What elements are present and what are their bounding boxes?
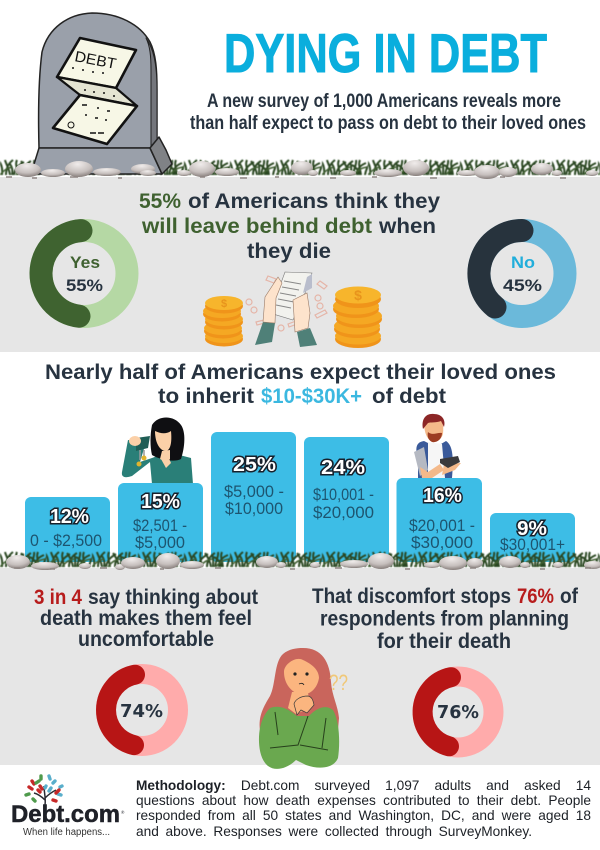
icon: hands holding receipt <box>246 272 327 347</box>
bar: 2,501 to 5,000 <box>118 483 203 562</box>
bar chart: expected inherited debt <box>25 432 575 562</box>
logo tree <box>26 776 62 805</box>
bar: 5,000 to 10,000: $10,000 <box>225 499 283 518</box>
bar: 2,501 to 5,000: $2,501 - <box>133 516 187 535</box>
donut: yes 55%: 55% <box>66 277 103 295</box>
methodology text: Methodology: Debt.com surveyed 1,097 adults and asked 14 <box>136 778 591 793</box>
heading: that discomfort: 76% <box>517 585 554 608</box>
donut: no 45%: 45% <box>503 277 542 295</box>
rocks: middle strip <box>6 553 600 570</box>
heading: that discomfort: respondents from planning <box>320 608 569 630</box>
bar: 2,501 to 5,000: $5,000 <box>135 533 185 552</box>
heading: that discomfort: for their death <box>377 630 511 653</box>
heading: 3 in 4: uncomfortable <box>78 628 214 651</box>
heading: 55% of Americans: will leave behind debt <box>141 214 372 238</box>
bar: 20,001 to 30,000: 16% <box>423 485 462 507</box>
gray band: discomfort <box>0 568 600 765</box>
grass strip: top <box>0 155 600 175</box>
heading: nearly half of Americans: to inherit <box>158 384 254 408</box>
bar: 10,001 to 20,000: $20,000 <box>313 503 374 522</box>
bar: 20,001 to 30,000: $20,001 - <box>409 516 475 535</box>
icon: tombstone with debt paper: DEBT <box>73 48 118 73</box>
bar: 30,001 plus: $30,001+ <box>500 535 565 554</box>
heading: that discomfort: of <box>560 585 579 608</box>
donut: 74% <box>106 674 178 746</box>
heading: that discomfort: That discomfort stops <box>312 585 511 608</box>
bar: 5,000 to 10,000: $5,000 - <box>224 482 284 501</box>
bar: 2,501 to 5,000: 15% <box>141 491 180 513</box>
heading: 55% of Americans <box>139 189 440 263</box>
heading: that discomfort <box>312 585 579 653</box>
methodology text <box>136 778 591 839</box>
bar: 10,001 to 20,000: $10,001 - <box>313 485 374 504</box>
logo: Debt.com: Debt.com <box>11 801 120 828</box>
icon: woman emptying wallet <box>122 418 193 484</box>
heading: nearly half of Americans: $10-$30K+ <box>261 384 362 408</box>
donut: no 45% <box>479 230 565 316</box>
logo: Debt.com: When life happens... <box>23 827 110 838</box>
bar: 30,001 plus <box>490 513 575 562</box>
icon: tombstone with debt paper <box>31 13 172 174</box>
bar: 5,000 to 10,000 <box>211 432 296 562</box>
heading: 55% of Americans: they die <box>247 239 331 263</box>
icon: thinking woman: ?? <box>329 670 348 695</box>
heading: 55% of Americans: of Americans think they <box>188 189 440 213</box>
donut: 74%: 74% <box>120 701 163 722</box>
icon: right coin stack <box>333 286 382 348</box>
icon: thinking woman <box>259 648 348 769</box>
donut: 76% <box>422 676 494 748</box>
icon: right coin stack: $ <box>354 287 362 303</box>
methodology text: questions about how death expenses contributed to their debt. People <box>136 793 591 808</box>
logo: Debt.com <box>11 776 125 838</box>
methodology text: responded from all 50 states and Washington, DC, and were aged 18 <box>136 808 591 823</box>
bar: 5,000 to 10,000: 25% <box>233 454 276 476</box>
heading: nearly half of Americans <box>45 360 556 408</box>
methodology text: and above. Responses were collected through SurveyMonkey. <box>136 824 532 839</box>
bar: 20,001 to 30,000 <box>396 478 482 562</box>
donut: yes 55%: Yes <box>70 254 100 272</box>
bar: 10,001 to 20,000: 24% <box>321 457 365 479</box>
bar: 10,001 to 20,000 <box>304 437 389 562</box>
pebbles along ground edges <box>6 177 591 569</box>
heading: 3 in 4: death makes them feel <box>40 607 252 630</box>
bar: 0 to 2,500: 12% <box>50 506 89 528</box>
gray band: leave behind debt <box>0 177 600 352</box>
heading: nearly half of Americans: Nearly half of Americans expect their loved ones <box>45 360 556 384</box>
donut: yes 55% <box>41 230 127 316</box>
heading: 3 in 4: 3 in 4 <box>34 586 82 609</box>
heading: 3 in 4: say thinking about <box>88 586 258 609</box>
grass strip: middle <box>0 547 600 567</box>
heading: 55% of Americans: 55% <box>139 189 181 213</box>
bar: 20,001 to 30,000: $30,000 <box>411 533 473 552</box>
donut: 76%: 76% <box>437 702 479 723</box>
donut: no 45%: No <box>511 254 535 272</box>
icon: man with tablet <box>414 414 461 478</box>
icon: left coin stack: $ <box>221 298 227 310</box>
heading: 55% of Americans: when <box>378 214 436 238</box>
rocks: top strip <box>15 160 598 179</box>
heading: 3 in 4 <box>34 586 258 651</box>
subtitle <box>190 91 586 134</box>
bar: 0 to 2,500: 0 - $2,500 <box>30 531 102 550</box>
bar: 30,001 plus: 9% <box>517 518 547 540</box>
bar: 0 to 2,500 <box>25 497 110 562</box>
logo: Debt.com: ® <box>121 809 125 815</box>
icon: left coin stack <box>203 296 243 346</box>
heading: nearly half of Americans: of debt <box>372 384 446 408</box>
